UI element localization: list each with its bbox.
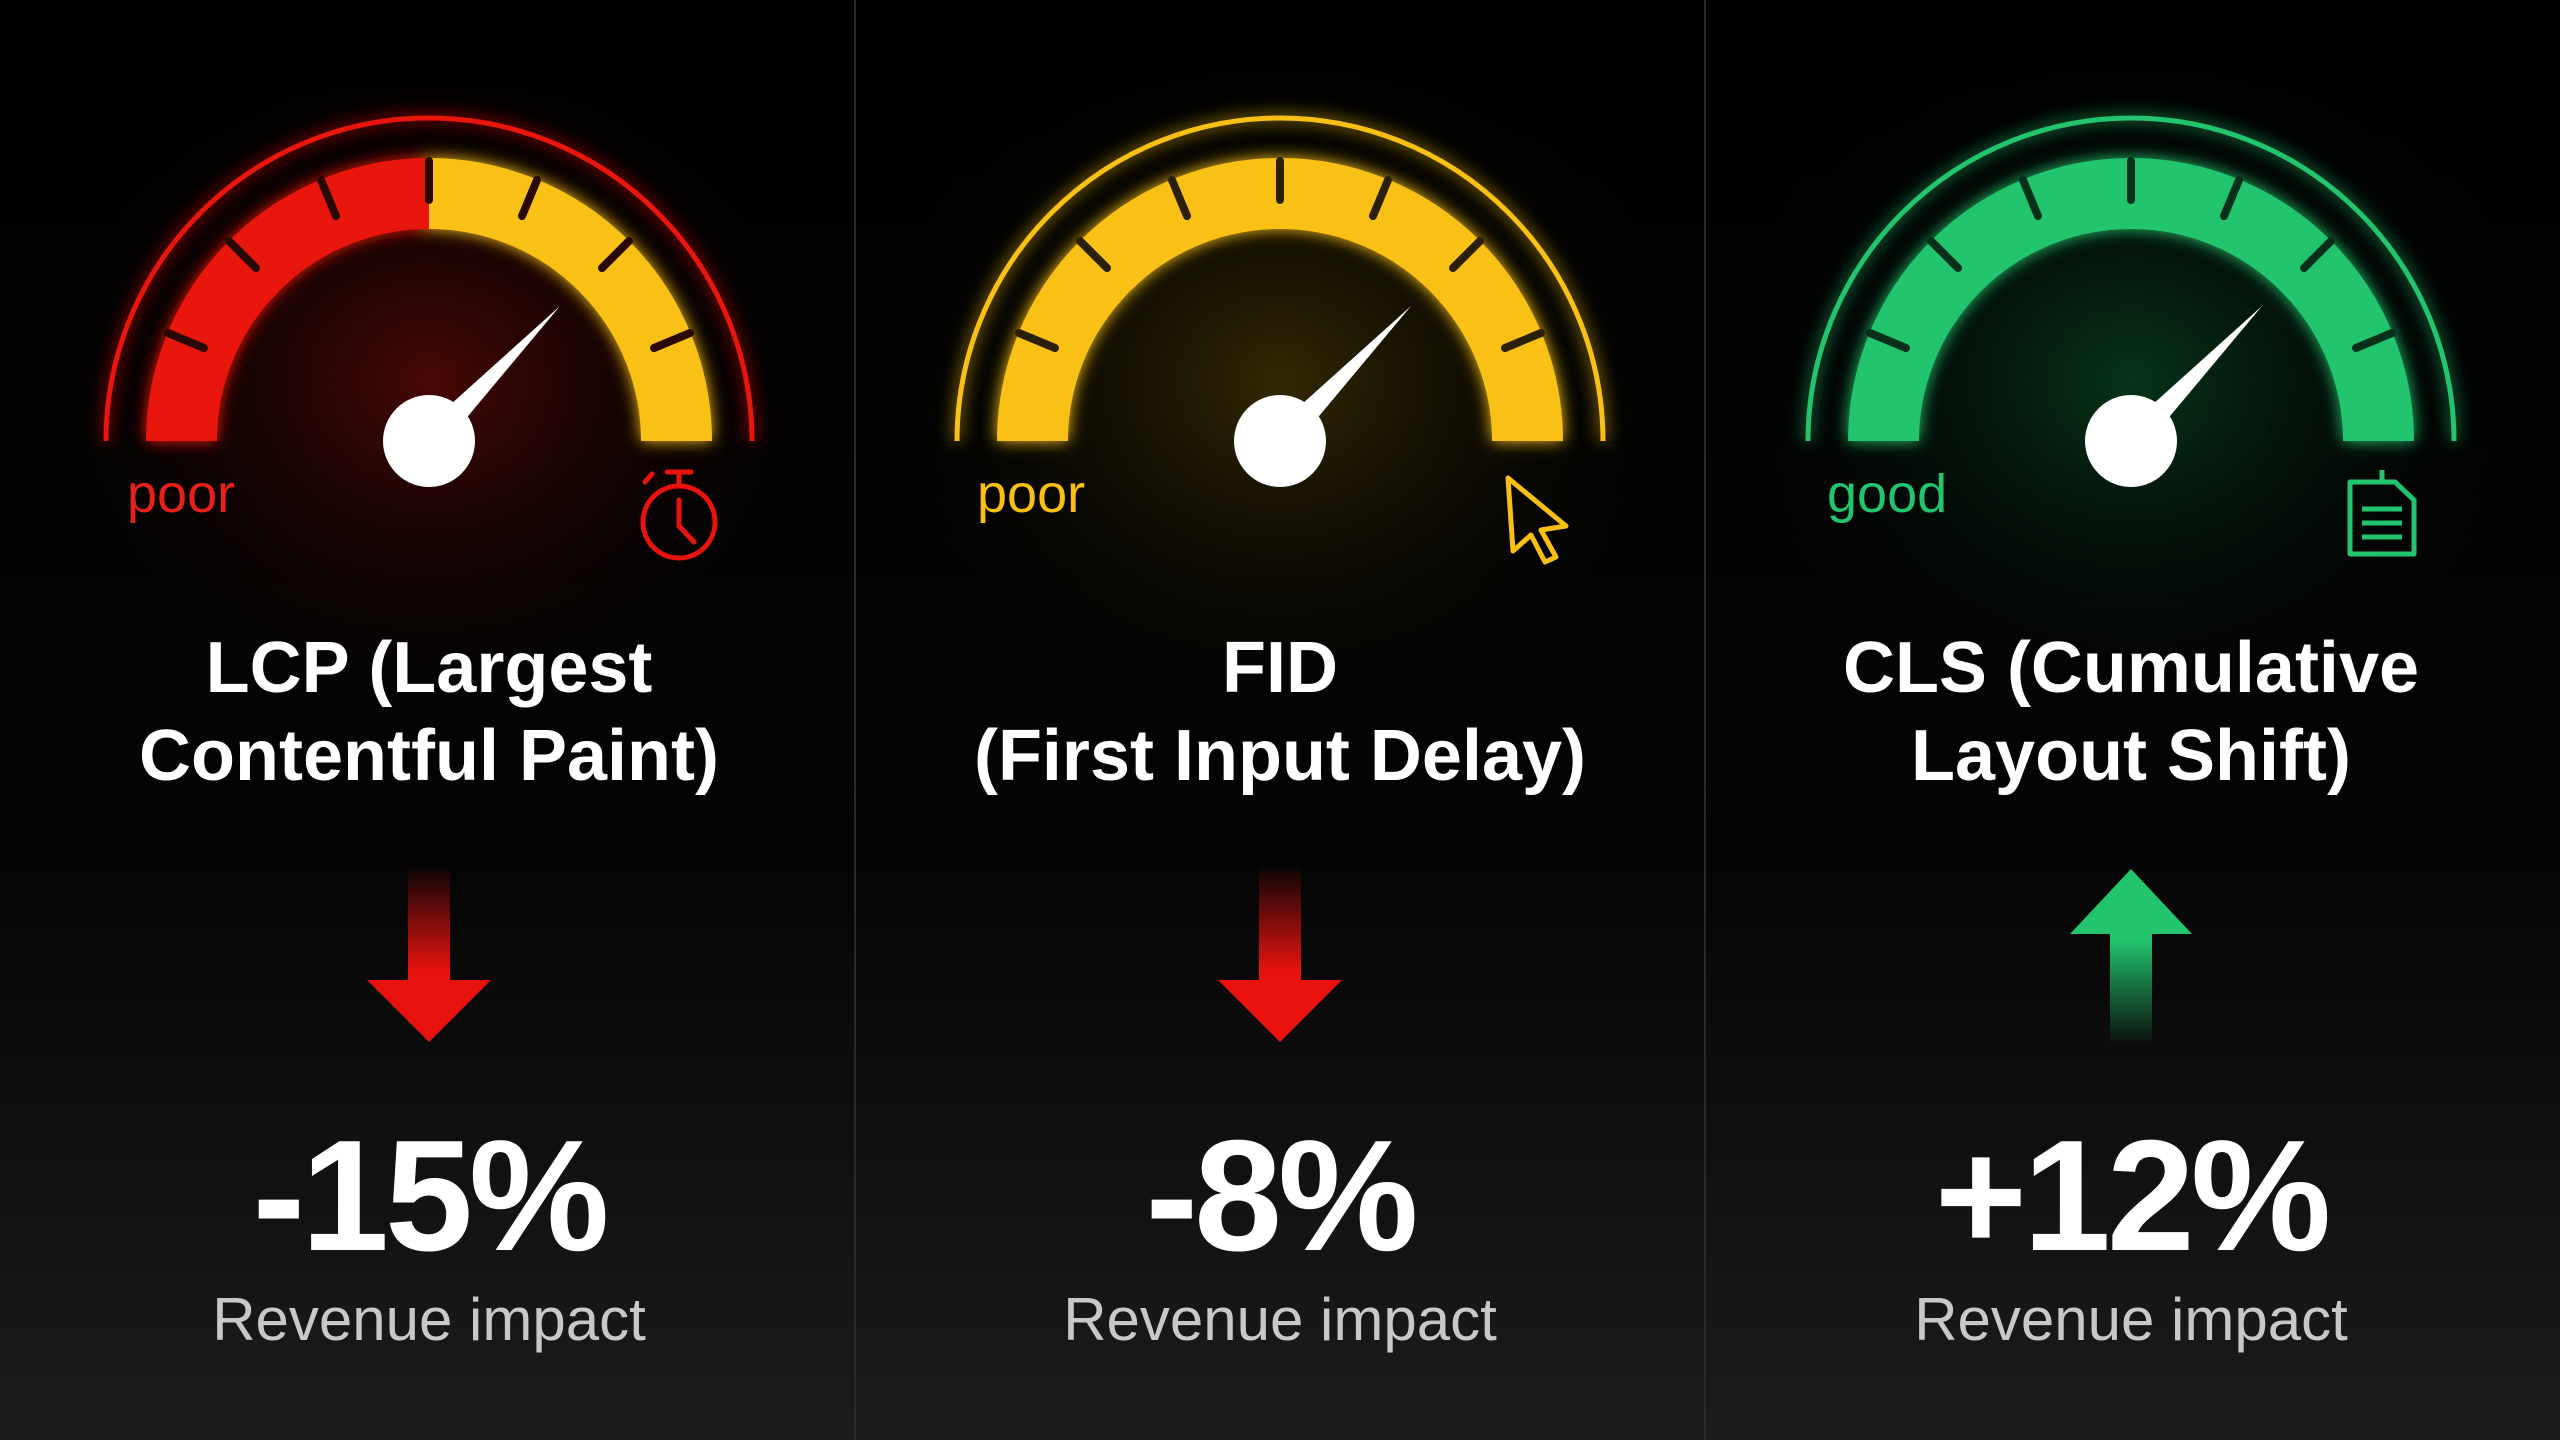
value: +12% — [1935, 1108, 2328, 1284]
icon: stopwatch — [643, 472, 715, 558]
label: poor: poor — [977, 464, 1085, 524]
panel: LCP — [9, 20, 849, 1353]
needle — [383, 306, 560, 487]
panel: FID: (First Input Delay) — [974, 716, 1586, 796]
label: poor: poor — [127, 464, 235, 524]
panel: LCP: Contentful Paint) — [139, 716, 719, 796]
panel: FID — [860, 20, 1700, 1353]
panel: CLS — [1711, 20, 2551, 1353]
arrow: down — [1218, 865, 1342, 1042]
gauge: LCP — [106, 118, 752, 441]
panel: LCP: Revenue impact — [212, 1286, 646, 1353]
panel: CLS: Layout Shift) — [1911, 716, 2351, 796]
panel: CLS: Revenue impact — [1914, 1286, 2348, 1353]
gauge: CLS — [1808, 118, 2454, 441]
title: FID — [1222, 628, 1338, 708]
arrow: up — [2070, 869, 2192, 1045]
icon: document — [2350, 470, 2414, 554]
title: LCP (Largest — [206, 628, 652, 708]
value: -8% — [1146, 1108, 1415, 1284]
arrow: down — [367, 865, 491, 1042]
needle — [2085, 306, 2262, 487]
gauge: FID — [957, 118, 1603, 441]
value: -15% — [253, 1108, 606, 1284]
title: CLS (Cumulative — [1843, 628, 2419, 708]
panel: FID: Revenue impact — [1063, 1286, 1497, 1353]
icon: cursor — [1508, 478, 1566, 562]
label: good: good — [1827, 464, 1947, 524]
needle — [1234, 306, 1411, 487]
